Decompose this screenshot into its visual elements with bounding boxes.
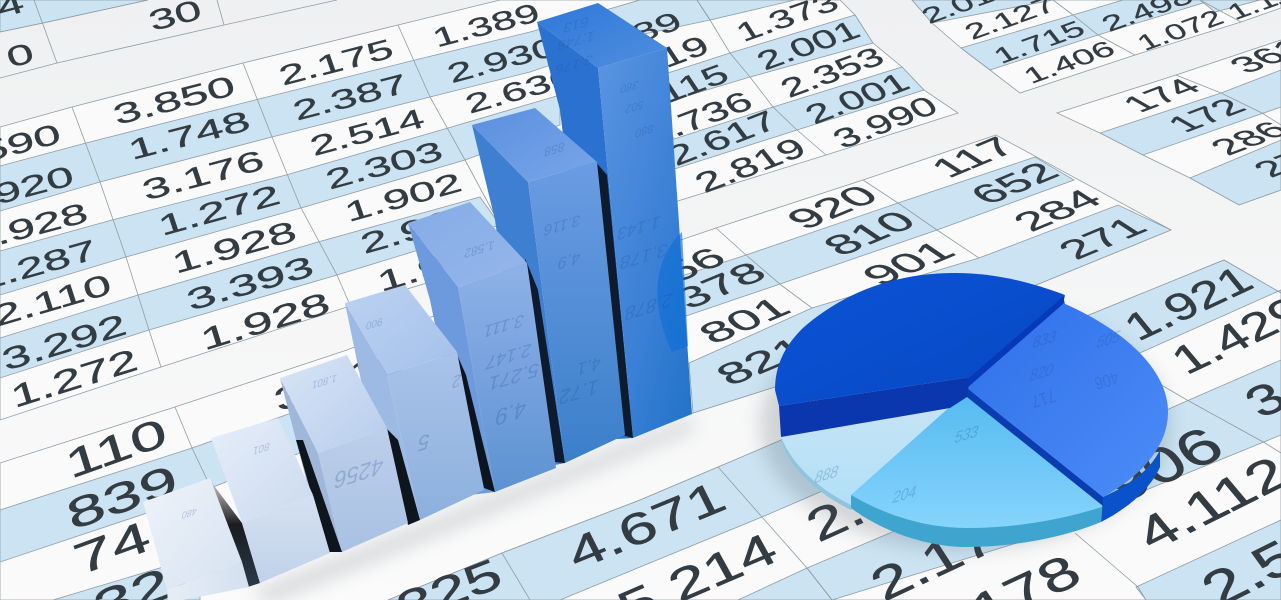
- pie reflections: 533: [952, 422, 981, 448]
- bar reflections: 3.111: [481, 310, 526, 342]
- table: centre: 284: [1004, 184, 1112, 237]
- table: main spreadsheet: 2.175: [275, 33, 398, 92]
- table: main spreadsheet: 1.928: [196, 286, 334, 357]
- table: lower left: 3.810: [270, 343, 411, 418]
- bar 4: [345, 285, 484, 520]
- bar reflections: 3.116: [542, 211, 582, 238]
- bar reflections: 5.271: [486, 358, 541, 395]
- bar reflections: [180, 13, 675, 521]
- slice: mid blue: [967, 303, 1168, 522]
- table: top left: [0, 0, 337, 78]
- bar reflections: 5: [416, 428, 431, 457]
- table: main spreadsheet: 2.303: [322, 136, 447, 196]
- table: centre: 920: [777, 180, 888, 235]
- table: centre: 271: [1049, 212, 1157, 265]
- table: lower left: 110: [60, 410, 172, 487]
- table: bottom right: 1.906: [1038, 417, 1236, 539]
- shadow between bars 3 and 4: [385, 427, 420, 525]
- table: top right: 1.406: [1018, 36, 1121, 88]
- pie chart: 3D four-slice pie: [775, 273, 1168, 547]
- shadow between bars 4 and 5: [455, 350, 495, 492]
- table: bottom right: 2.671: [797, 439, 974, 552]
- table: centre: 901: [853, 236, 965, 291]
- table: main spreadsheet: 2.930: [443, 32, 561, 89]
- pie base: [966, 295, 1104, 497]
- table: main spreadsheet: 1.272: [7, 343, 142, 415]
- table: main spreadsheet: 3.850: [109, 69, 239, 131]
- bar reflections: 1.748: [556, 27, 597, 54]
- bar reflections: 2.878: [623, 288, 675, 324]
- table: main spreadsheet: 2.617: [661, 106, 785, 172]
- bar reflections: 380: [619, 77, 640, 97]
- table: centre: 821: [707, 331, 818, 392]
- table: right side: 174: [1113, 74, 1210, 117]
- table: main spreadsheet: 1.902: [341, 167, 466, 228]
- table: bottom right: 1.921: [1114, 257, 1262, 349]
- table: bottom right: [339, 257, 1281, 600]
- table: main spreadsheet: 1.389: [568, 6, 688, 68]
- pie reflections: 406: [1092, 367, 1121, 393]
- bar reflections: 3.176: [554, 51, 595, 78]
- slice: dark blue: [775, 273, 1065, 437]
- table: top right: [912, 0, 1281, 93]
- table: main spreadsheet: 1.736: [637, 85, 759, 151]
- bar reflections: 1.582: [463, 237, 495, 262]
- bar reflections: 480: [180, 505, 198, 521]
- bar 7: [537, 3, 692, 440]
- bar reflections: 4.1: [576, 352, 602, 380]
- pie reflections: 505: [1094, 327, 1123, 353]
- pie reflections: 762: [877, 357, 906, 383]
- table: main spreadsheet: 1.748: [124, 104, 254, 166]
- table: main spreadsheet: 2.353: [774, 41, 891, 103]
- table: main spreadsheet: 1.928: [373, 232, 503, 298]
- table: main spreadsheet: 2.519: [595, 29, 715, 95]
- bar reflections: 858: [543, 139, 565, 160]
- table: right side: [1057, 35, 1281, 205]
- bar reflections: 502: [624, 97, 645, 117]
- bar reflections: 1.801: [311, 371, 338, 391]
- table: main spreadsheet: 2.630: [461, 61, 579, 119]
- table: main spreadsheet: 2.001: [751, 15, 866, 76]
- bar reflections: 801: [252, 439, 271, 457]
- table: lower left: 839: [61, 456, 183, 539]
- bar reflections: 880: [634, 121, 655, 141]
- table: main spreadsheet: 3.176: [138, 144, 268, 206]
- table: centre: [628, 132, 1171, 425]
- shadow between bars 5 and 6: [525, 258, 565, 463]
- pie reflections: 833: [1030, 327, 1059, 353]
- table: lower left: 741: [68, 499, 193, 585]
- bar reflections: 4.9: [556, 248, 582, 273]
- pie reflections: 711: [803, 388, 830, 413]
- table: main spreadsheet: [0, 0, 958, 420]
- table: main spreadsheet: 2.819: [688, 132, 813, 199]
- table: centre: 356: [628, 242, 735, 299]
- chart shadows: [250, 300, 1170, 600]
- table: top right: 1.715: [988, 16, 1091, 68]
- bar reflections: 900: [365, 314, 384, 332]
- bar reflections: 613: [562, 13, 590, 36]
- table: main spreadsheet: 1.928: [168, 214, 300, 280]
- table: main spreadsheet: 2.115: [617, 58, 735, 122]
- pie reflections: 717: [1029, 385, 1058, 411]
- bar reflections: 2.147: [484, 338, 534, 373]
- table: main spreadsheet: 2.001: [798, 66, 916, 130]
- bar reflections: 4.9: [493, 394, 528, 430]
- slice: light blue: [851, 392, 1106, 547]
- pie reflections: 848: [965, 327, 994, 353]
- table: lower left: [0, 290, 500, 600]
- table: main spreadsheet: 2.387: [289, 68, 412, 127]
- bar reflections: 3.178: [618, 238, 670, 273]
- pie reflections: [803, 327, 1123, 508]
- table: bottom right: 4.671: [559, 471, 733, 579]
- bar 1: [143, 478, 249, 600]
- slice: pale glass: [781, 405, 958, 510]
- table: centre: 810: [814, 206, 926, 261]
- pie reflections: 888: [812, 462, 841, 488]
- table: centre: 378: [666, 256, 775, 315]
- table: centre: 801: [690, 291, 799, 350]
- table: main spreadsheet: 1.272: [154, 178, 284, 242]
- bar 2: [211, 418, 330, 587]
- bar reflections: 4256: [332, 451, 385, 493]
- table: centre: 117: [921, 132, 1026, 183]
- bar 6: [472, 108, 625, 470]
- bar reflections: 1.72: [557, 374, 600, 409]
- shadow between bars 6 and 7: [594, 160, 633, 438]
- table: main spreadsheet: 2.514: [306, 103, 429, 162]
- table: top right: 1.072: [1132, 6, 1229, 56]
- pie reflections: 204: [890, 482, 919, 508]
- table: right side: 172: [1158, 94, 1255, 137]
- bar chart: ascending 3D bars: [143, 3, 692, 600]
- table: centre: 652: [961, 157, 1069, 210]
- table: main spreadsheet: 3.393: [183, 250, 318, 317]
- bar 3: [280, 355, 408, 552]
- table: main spreadsheet: 3.990: [826, 90, 945, 154]
- table: main spreadsheet: 2.928: [356, 197, 484, 260]
- bar reflections: 1.143: [615, 212, 662, 244]
- table: main spreadsheet: 3.292: [0, 307, 130, 377]
- bar reflections: 2: [450, 370, 463, 393]
- bar 5: [408, 202, 556, 495]
- pie reflections: 820: [1027, 360, 1056, 386]
- table: top left: 0: [3, 38, 38, 74]
